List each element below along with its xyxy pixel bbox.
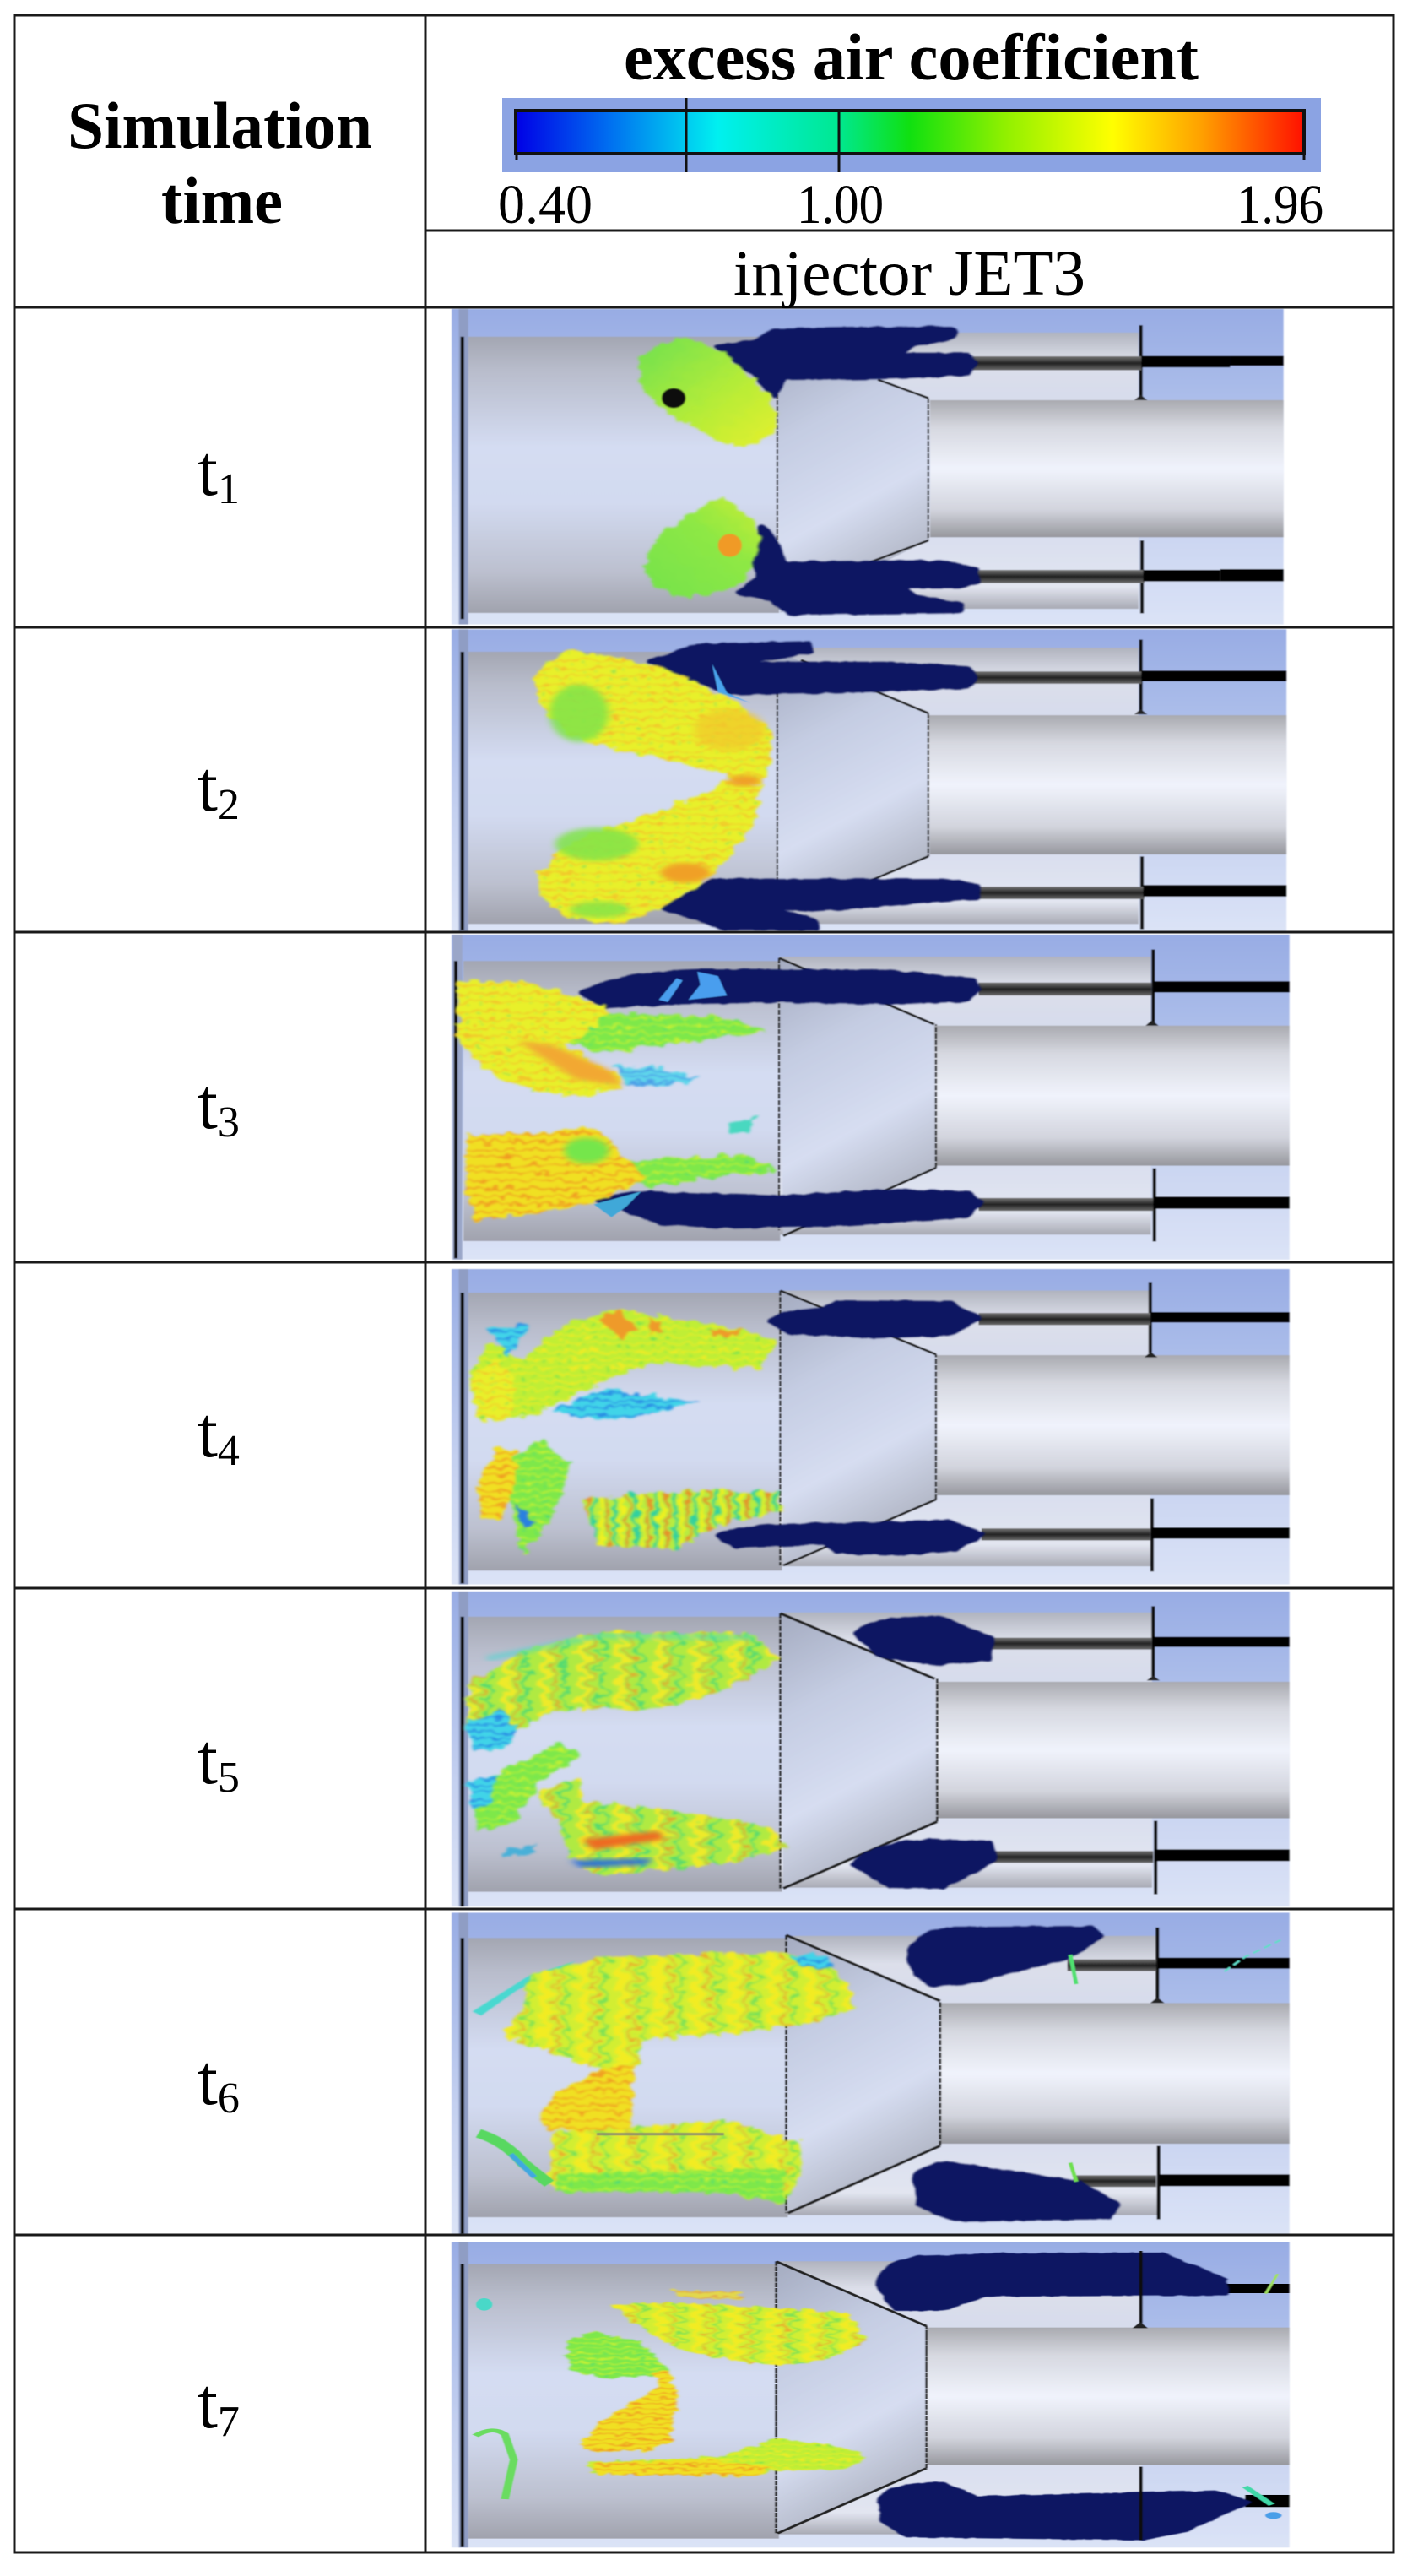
time label t5: t <box>198 1718 218 1799</box>
time label t6: t <box>198 2039 218 2120</box>
heading: excess air coefficient: excess air coefficient <box>624 20 1199 94</box>
column heading: injector JET3: injector JET3 <box>733 238 1085 309</box>
panel: t4 simulation image <box>452 1269 1290 1585</box>
time label t3: t <box>198 1063 218 1144</box>
panel: t3 simulation image <box>452 935 1290 1260</box>
time label t1: 1 <box>218 465 240 513</box>
panel: t2 simulation image <box>452 629 1286 931</box>
row header: Simulation time <box>68 89 372 237</box>
row header: Simulation time: Simulation <box>68 89 372 162</box>
time label t4: t <box>198 1391 218 1472</box>
panel: t6 simulation image <box>452 1912 1290 2235</box>
legend value labels: 0.40 <box>498 174 593 236</box>
time label t2: 2 <box>218 781 240 829</box>
colour legend bar <box>502 98 1321 172</box>
legend value labels: 1.00 <box>797 174 884 236</box>
time label t3: 3 <box>218 1098 240 1147</box>
time label t1: t <box>198 430 218 511</box>
time label t4: 4 <box>218 1427 240 1475</box>
time label t7: t <box>198 2362 218 2443</box>
time label t7: 7 <box>218 2398 240 2446</box>
legend value labels <box>498 174 1323 236</box>
panel: t7 simulation image <box>452 2242 1290 2547</box>
time label t6: 6 <box>218 2074 240 2123</box>
time label t2: t <box>198 746 218 827</box>
row header: Simulation time: time <box>161 164 283 237</box>
panel: t1 simulation image <box>452 309 1284 625</box>
panel: t5 simulation image <box>452 1592 1290 1906</box>
time label t5: 5 <box>218 1754 240 1802</box>
legend value labels: 1.96 <box>1237 174 1323 236</box>
